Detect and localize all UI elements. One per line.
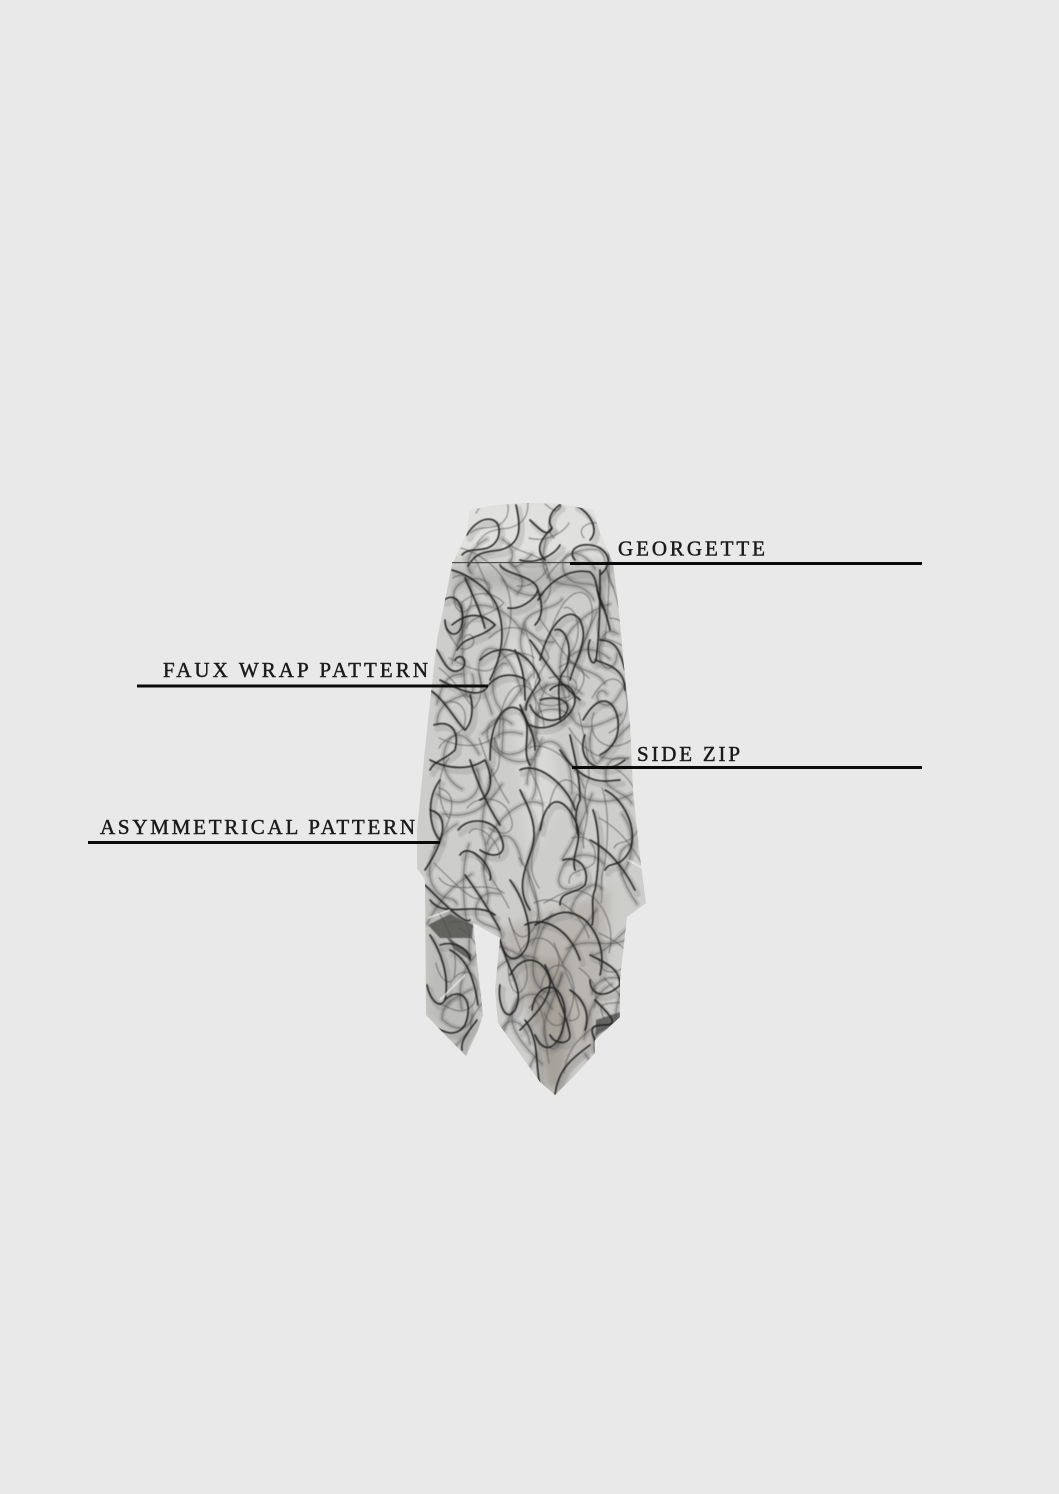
waist seam xyxy=(452,562,572,563)
skirt illustration xyxy=(417,503,646,1095)
fabric shading xyxy=(426,498,612,1090)
callout: side zip xyxy=(572,742,922,769)
callout: faux wrap pattern xyxy=(137,658,488,688)
grey swirl halos xyxy=(427,509,638,1129)
secondary swirl strokes xyxy=(426,503,641,1074)
callout: asymmetrical pattern: ASYMMETRICAL PATTERN xyxy=(100,815,415,839)
pale fold highlights xyxy=(428,860,642,1000)
callout: side zip: SIDE ZIP xyxy=(637,742,740,766)
callout: georgette xyxy=(570,536,922,565)
fabric base xyxy=(410,498,655,1103)
dark swirl strokes xyxy=(425,505,635,1095)
callout: georgette: GEORGETTE xyxy=(618,536,765,560)
dark fold under the back panel xyxy=(428,914,620,1036)
infographic canvas xyxy=(88,503,922,1095)
callout: faux wrap pattern: FAUX WRAP PATTERN xyxy=(163,658,428,682)
